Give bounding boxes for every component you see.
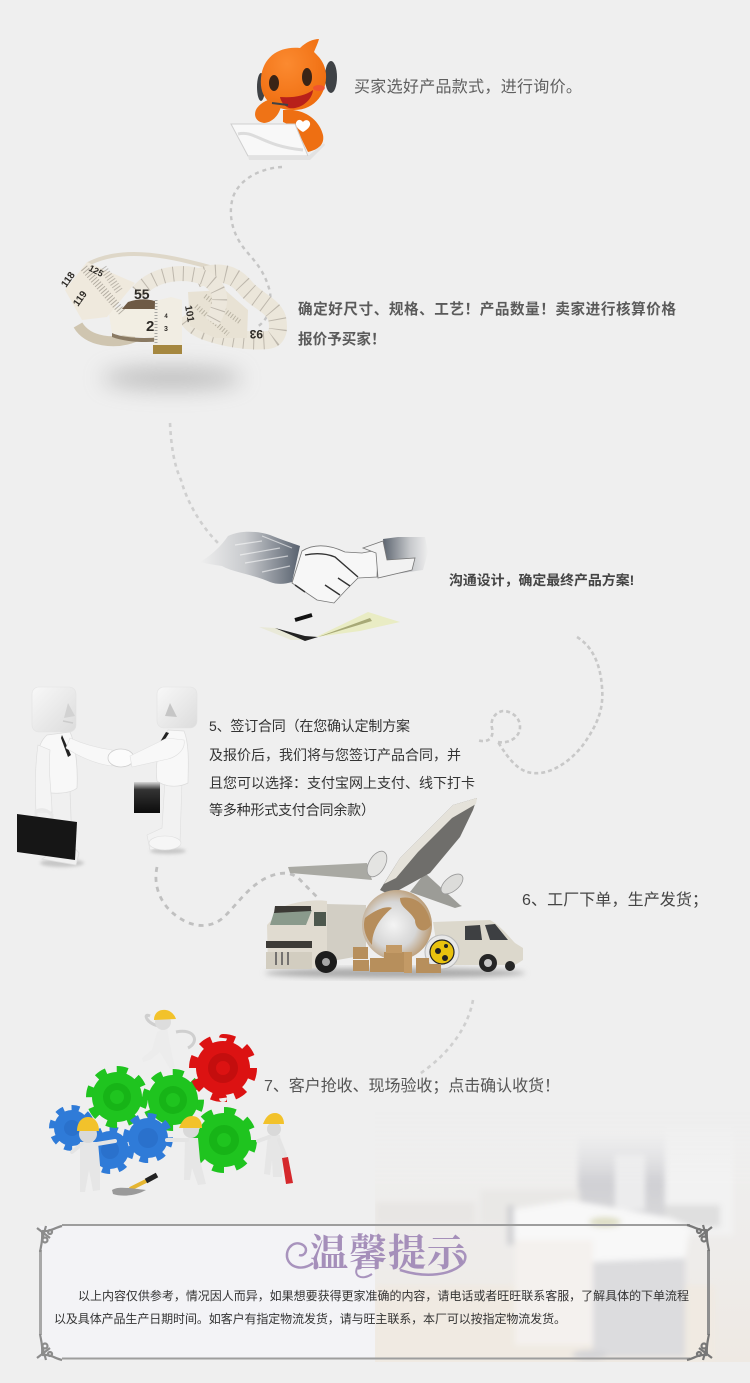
mascot arm and body: [283, 110, 323, 152]
text: step 2: [298, 300, 676, 348]
left man head: [32, 687, 76, 732]
tape numbers: 2: [146, 318, 154, 335]
dashed path: step 1 to 2: [231, 167, 282, 327]
corner ornament bottom left: [37, 1334, 62, 1360]
heading: warm tips with flourish: 温馨提示: [310, 1233, 468, 1275]
mascot eyes: [269, 68, 312, 91]
truck wheel: [315, 951, 337, 973]
businessmen shaking hands: [17, 687, 197, 867]
text: tips body: [54, 1288, 689, 1326]
coil back: [78, 325, 135, 341]
briefcase left: [36, 810, 52, 822]
left man legs: [42, 790, 79, 865]
logistics illustration: [265, 798, 525, 978]
tape numbers: 4: [164, 314, 168, 320]
hammer: [112, 1175, 157, 1196]
tip panel fill: [40, 1226, 375, 1359]
left man torso: [36, 732, 77, 793]
upper band: [138, 274, 220, 322]
right sleeve: [383, 537, 428, 574]
green gear 1: [90, 1070, 144, 1124]
heart badge: [296, 120, 310, 132]
top worker: [142, 1010, 194, 1069]
right man torso: [156, 730, 188, 786]
truck cab: [267, 900, 327, 968]
tape numbers: 3: [164, 326, 168, 333]
frame lines: [62, 1224, 690, 1226]
plane fuselage: [380, 798, 477, 895]
mascot cheek: [313, 85, 325, 91]
truck bumper: [266, 941, 312, 948]
truck windshield: [270, 910, 312, 925]
text: step 5 contract: 5、签订合同（在您确认定制方案: [209, 718, 410, 734]
briefcase right: [134, 782, 160, 813]
text: step 5 contract: 及报价后，我们将与您签订产品合同，并: [209, 747, 461, 763]
plane upper body: [384, 798, 477, 884]
panel: warm tips frame: [37, 1225, 712, 1360]
right man head: [157, 687, 197, 728]
dashed path: step 6 to 7: [418, 1000, 473, 1075]
shadows: [40, 848, 186, 867]
text: step 6: 6、工厂下单，生产发货；: [522, 891, 708, 909]
left coil: [65, 262, 135, 320]
pen: [295, 615, 312, 620]
left man arm: [66, 738, 112, 766]
red screwdriver: [282, 1157, 293, 1184]
plane engines: [363, 848, 391, 880]
top loop: [88, 254, 240, 280]
left man tie: [61, 735, 71, 757]
blue gear 2: [89, 1129, 131, 1171]
ground shadow: [265, 968, 525, 978]
tape measure: [59, 254, 278, 389]
green gear 3: [195, 1111, 253, 1169]
tape numbers: 101: [182, 305, 196, 323]
gears and workers: [52, 1010, 293, 1196]
green gear 2: [146, 1073, 200, 1127]
left sleeve: [200, 532, 300, 584]
left worker: [72, 1117, 115, 1192]
text: step 5 contract: 且您可以选择：支付宝网上支付、线下打卡: [209, 775, 475, 791]
mascot mouth: [280, 90, 313, 108]
text: step 5 contract: 等多种形式支付合同余款）: [209, 802, 375, 818]
finger lines: [295, 554, 358, 595]
hanging tape end: [154, 297, 182, 346]
dashed path: step 5 to 6: [156, 867, 318, 926]
tape numbers: [59, 263, 263, 341]
microphone: [272, 103, 288, 105]
van wheel: [479, 954, 497, 972]
right man shoes: [149, 836, 181, 850]
text: step 2: 报价予买家！: [298, 330, 386, 348]
right worker: [258, 1113, 285, 1177]
text: step 1: 买家选好产品款式，进行询价。: [354, 78, 582, 96]
globe: [362, 890, 432, 960]
icon: headphones: [257, 61, 337, 101]
dashed path: step 3 to 5: [477, 637, 602, 773]
text: step 7: 7、客户抢收、现场验收；点击确认收货！: [264, 1077, 560, 1095]
corner ornament bottom right: [687, 1334, 712, 1360]
right band: [186, 274, 278, 341]
tape numbers: 55: [134, 286, 150, 302]
tape numbers: 125: [87, 263, 105, 279]
dashed path: step 2 to 3: [170, 423, 218, 543]
kitchen background photo: [375, 1151, 750, 1362]
middle worker: [167, 1116, 206, 1185]
laptop: [231, 124, 308, 156]
tape middle mass: [188, 290, 248, 338]
mascot hand: [255, 98, 281, 123]
cardboard boxes: [353, 945, 441, 973]
text: tips body: 以上内容仅供参考，情况因人而异，如果想要获得更家准确的内容，请电话或者旺旺联系客服，了解具体的下单流程: [78, 1288, 689, 1303]
van: [433, 920, 523, 965]
text: step 2: 确定好尺寸、规格、工艺！产品数量！卖家进行核算价格: [298, 300, 676, 318]
tape numbers: 118: [59, 270, 78, 290]
clasped hands: [108, 749, 134, 767]
plane left wing: [288, 863, 372, 880]
mascot head: [261, 39, 326, 110]
blue gear 1: [52, 1108, 92, 1148]
blue gear 3: [126, 1116, 170, 1160]
handshake sketch: [200, 532, 428, 641]
tape numbers: 93: [249, 327, 263, 341]
notebook: [259, 627, 305, 640]
clock: [425, 935, 459, 969]
text: step 3: 沟通设计，确定最终产品方案!: [449, 572, 634, 588]
metal tip: [153, 345, 182, 354]
left man lower arm: [35, 745, 52, 812]
red gear: [193, 1038, 253, 1098]
sleeve hatching: [235, 536, 292, 572]
shadow: [102, 367, 242, 389]
mascot with laptop: [231, 39, 337, 160]
corner ornament top right: [687, 1225, 712, 1251]
right man tie: [157, 732, 169, 749]
text: step 5 contract: [209, 718, 475, 818]
text: tips body: 以及具体产品生产日期时间。如客户有指定物流发货，请与旺主联系，本厂可以按指定物流发货。: [54, 1311, 566, 1326]
right man arm: [130, 738, 184, 767]
corner ornament top left: [37, 1226, 62, 1252]
shaking hands: [292, 546, 378, 603]
right man legs: [147, 780, 182, 850]
plane right wing: [410, 873, 462, 908]
cuff: [363, 541, 415, 578]
center coil: [108, 305, 180, 337]
tape numbers: 119: [71, 289, 90, 309]
truck box: [326, 904, 366, 962]
